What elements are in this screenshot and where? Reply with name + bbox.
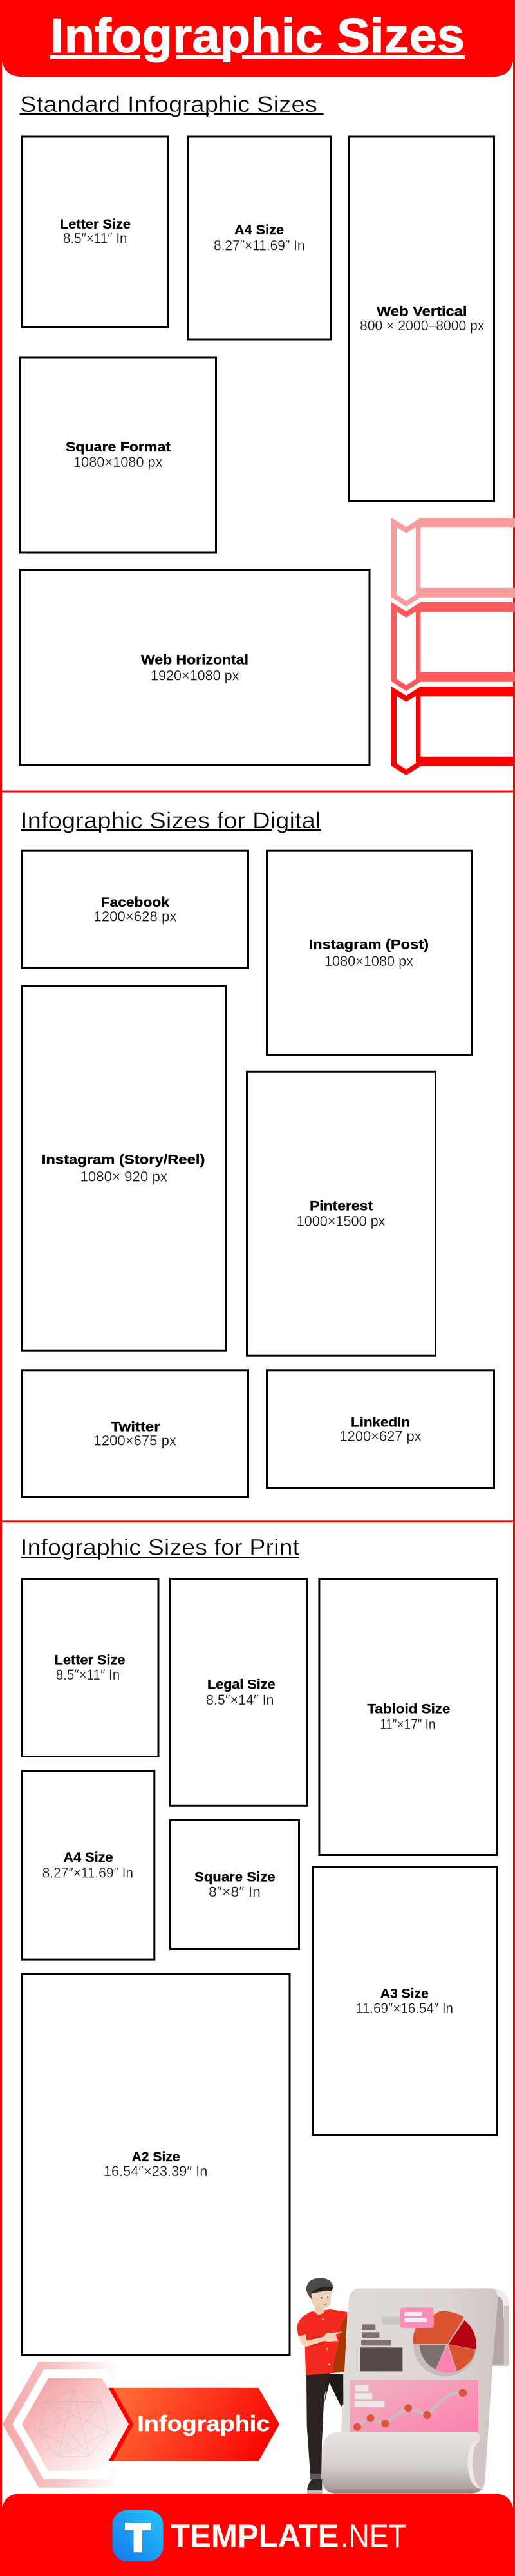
size box: Instagram (Story/Reel): Instagram (Story/Reel) [42, 1153, 205, 1167]
size box: Square Size: 8″×8″ In [209, 1884, 261, 1900]
size box: LinkedIn [267, 1370, 494, 1488]
banner label: Infographic [137, 2412, 270, 2436]
head and hair [306, 2278, 333, 2315]
scroll bottom roll [322, 2432, 485, 2494]
size box: A3 Size [313, 1867, 497, 2136]
hexagon inner [22, 2378, 129, 2471]
size box: A4 Size: A4 Size [234, 223, 284, 238]
size box: Letter Size: Letter Size [60, 217, 131, 232]
size box: A4 Size print [22, 1771, 154, 1960]
size box: Web Vertical [349, 137, 494, 501]
size box: A4 Size: 8.27″×11.69″ In [214, 237, 305, 253]
size box: A3 Size: A3 Size [380, 1987, 429, 2002]
logo wordmark: .NET [341, 2518, 406, 2554]
arm and hand [299, 2332, 343, 2347]
trousers and shoe [306, 2371, 343, 2494]
size box: A4 Size print: A4 Size [63, 1850, 113, 1865]
size box: Pinterest [247, 1072, 435, 1356]
bar chart dark [360, 2324, 402, 2371]
size box: LinkedIn: LinkedIn [351, 1415, 410, 1430]
size box: Instagram (Post): 1080×1080 px [324, 953, 413, 969]
size box: A4 Size print: 8.27″×11.69″ In [42, 1865, 133, 1881]
heading: standard: Standard Infographic Sizes [20, 92, 317, 117]
size box: Tabloid Size: 11″×17″ In [380, 1716, 435, 1732]
title: Infographic Sizes [50, 8, 465, 62]
size box: Twitter: 1200×675 px [93, 1432, 176, 1448]
shirt [297, 2309, 347, 2376]
size box: Legal Size: Legal Size [207, 1677, 276, 1692]
size box: Tabloid Size [319, 1579, 497, 1855]
size box: Letter Size print: 8.5″×11″ In [56, 1667, 120, 1683]
size box: Letter Size print [22, 1579, 158, 1757]
footer banner [0, 2494, 515, 2576]
hexagon outer ring [3, 2362, 119, 2488]
man figure [297, 2278, 347, 2494]
size box: A2 Size [22, 1975, 290, 2354]
decorative ribbon 1 [391, 518, 515, 607]
size box: LinkedIn: 1200×627 px [340, 1428, 422, 1444]
size box: A3 Size: 11.69″×16.54″ In [356, 2000, 453, 2016]
size box: Instagram (Post): Instagram (Post) [309, 937, 429, 952]
logo wordmark: TEMPLATE [171, 2518, 339, 2554]
size box: A2 Size: A2 Size [132, 2150, 180, 2164]
scroll paper [335, 2288, 509, 2493]
size box: Facebook [22, 851, 248, 969]
size box: Letter Size [22, 137, 169, 327]
network icon [39, 2389, 108, 2456]
pie chart [413, 2311, 477, 2376]
size box: Web Vertical: 800 × 2000–8000 px [360, 317, 484, 334]
size box: Pinterest: Pinterest [310, 1198, 373, 1213]
size box: Instagram (Story/Reel): 1080× 920 px [80, 1168, 167, 1185]
panel: sizes for print [21, 1535, 497, 2354]
pink line chart panel [350, 2380, 478, 2432]
size box: A2 Size: 16.54″×23.39″ In [104, 2163, 207, 2179]
size box: Square Size [170, 1820, 299, 1949]
size box: Web Vertical: Web Vertical [377, 304, 467, 319]
red banner arrow [108, 2388, 279, 2461]
size box: Square Format: Square Format [66, 440, 171, 455]
size box: Web Horizontal: Web Horizontal [141, 652, 248, 667]
decorative ribbon 2 [391, 602, 515, 691]
size box: A4 Size [188, 137, 331, 339]
size box: Letter Size print: Letter Size [55, 1653, 125, 1667]
size box: Letter Size: 8.5″×11″ In [63, 231, 127, 247]
size box: Instagram (Post) [267, 851, 471, 1055]
pink label card [400, 2307, 434, 2328]
illustration: man presenting charts on scroll [297, 2278, 509, 2494]
size box: Tabloid Size: Tabloid Size [367, 1701, 451, 1716]
size box: Twitter [22, 1370, 248, 1497]
size box: Twitter: Twitter [111, 1419, 160, 1434]
logo icon [112, 2510, 164, 2561]
size box: Legal Size [170, 1579, 308, 1806]
decorative ribbon 3 [391, 687, 515, 775]
size box: Instagram (Story/Reel) [22, 986, 225, 1350]
size box: Web Horizontal [21, 571, 370, 765]
size box: Facebook: Facebook [101, 895, 169, 910]
infographic hexagon badge [3, 2362, 279, 2488]
size box: Square Format: 1080×1080 px [73, 454, 162, 470]
heading: digital: Infographic Sizes for Digital [21, 808, 321, 833]
size box: Square Format [21, 357, 216, 553]
size box: Legal Size: 8.5″×14″ In [206, 1692, 274, 1708]
size box: Facebook: 1200×628 px [93, 908, 176, 924]
panel: standard infographic sizes [19, 92, 515, 775]
size box: Square Size: Square Size [194, 1870, 276, 1884]
panel: sizes for digital [21, 808, 494, 1497]
size box: Web Horizontal: 1920×1080 px [151, 668, 239, 684]
heading: print: Infographic Sizes for Print [21, 1535, 299, 1560]
size box: Pinterest: 1000×1500 px [297, 1213, 385, 1229]
header banner [0, 0, 515, 77]
